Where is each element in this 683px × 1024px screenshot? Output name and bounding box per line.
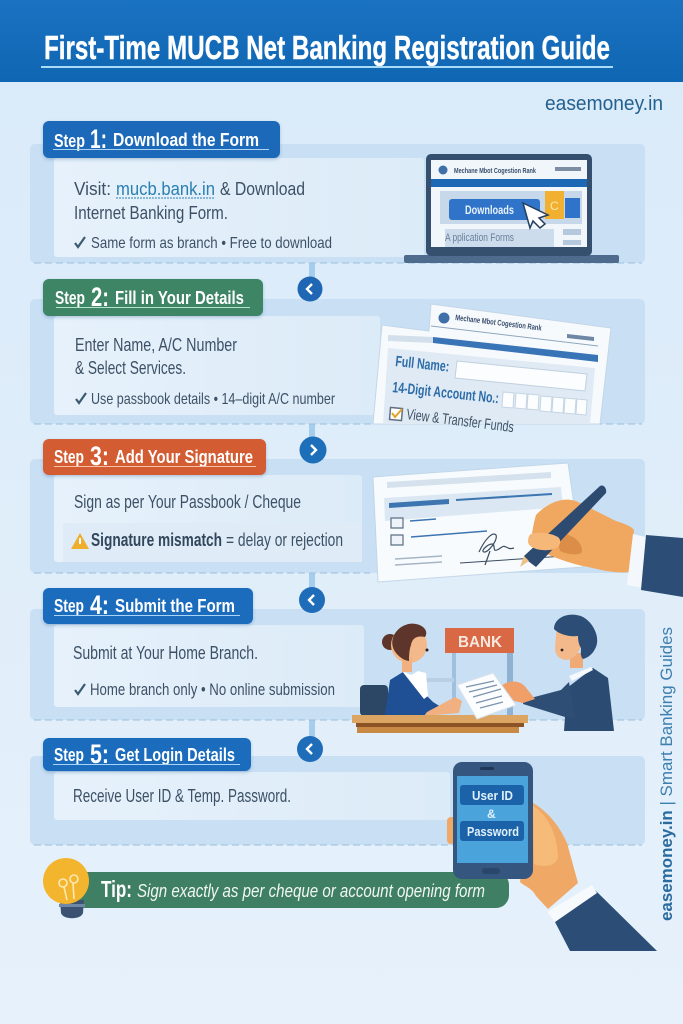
step 4 heading tag: 4: (90, 590, 109, 620)
step 4 heading tag: Step (54, 595, 84, 616)
step 2 heading tag: Step (55, 287, 85, 308)
step 1 heading tag: Step (54, 130, 85, 151)
step 1 text: Visit: (74, 179, 111, 199)
step 2 text: & Select Services. (75, 358, 186, 378)
connector lines between steps (309, 263, 315, 772)
step 5 heading tag: 5: (90, 739, 109, 769)
step 2 heading tag: 2: (91, 282, 109, 312)
brand: easemoney.in: easemoney.in (545, 93, 663, 115)
tip bar: Sign exactly as per cheque or account opening form (137, 881, 485, 901)
man customer (502, 615, 614, 731)
step 1 text: mucb.bank.in (116, 179, 215, 199)
panel: step 5 (30, 738, 645, 845)
step 2 heading tag: Fill in Your Details (115, 287, 244, 308)
step 1 heading tag (43, 121, 280, 158)
step 1 text: & Download (220, 179, 305, 199)
step 5 heading tag: Get Login Details (115, 744, 235, 765)
step 1 heading tag: 1: (90, 124, 107, 154)
step 1 heading tag: Download the Form (113, 129, 259, 150)
illustration: hand holding phone (447, 762, 657, 951)
icon: laptop with downloads page: C (550, 199, 559, 213)
step 1 text: Internet Banking Form. (74, 203, 228, 223)
step 1 text: Same form as branch • Free to download (91, 235, 332, 252)
bank sign (445, 628, 514, 653)
icon: laptop with downloads page: Downloads (465, 203, 514, 217)
step 2 text (75, 335, 336, 408)
phone (453, 762, 533, 879)
panel: step 4 (30, 588, 645, 733)
arrow: step 1 to 2 (298, 276, 322, 302)
vertical brand line: easemoney.in | Smart Banking Guides (657, 627, 676, 921)
bank sign: BANK (458, 634, 502, 651)
panel: step 1 (30, 121, 645, 263)
icon: laptop with downloads page: A pplication Forms (445, 232, 514, 244)
step 2 text: Enter Name, A/C Number (75, 335, 237, 355)
phone: & (487, 807, 496, 821)
illustration: application form: Full Name: (395, 353, 450, 376)
warning line: Signature mismatch (91, 530, 222, 550)
illustration: cheque and signing hand (373, 463, 683, 597)
tip bar (72, 872, 509, 908)
illustration: application form: 14-Digit Account No.: (392, 379, 500, 407)
icon: laptop with downloads page (404, 154, 619, 263)
phone: User ID (472, 788, 513, 803)
step 3 text: Sign as per Your Passbook / Cheque (74, 492, 301, 512)
panel: step 3 (30, 439, 683, 597)
arrow: step 4 to 5 (297, 736, 323, 762)
warning line (71, 530, 343, 550)
step 1 text (74, 179, 332, 252)
step 3 heading tag: Add Your Signature (115, 446, 253, 467)
illustration: bank counter handover (352, 615, 614, 733)
step 5 text: Receive User ID & Temp. Password. (73, 786, 291, 806)
step 2 heading tag (43, 279, 263, 316)
icon: light bulb (43, 858, 89, 918)
step 3 heading tag (43, 439, 266, 475)
step 4 text: Home branch only • No online submission (90, 680, 335, 699)
tip bar: Tip: (101, 876, 132, 902)
panel: step 2 (30, 279, 645, 436)
step 2 text: Use passbook details • 14–digit A/C number (91, 391, 336, 408)
step 4 text: Submit at Your Home Branch. (73, 643, 258, 663)
desk (352, 715, 528, 733)
step 4 heading tag: Submit the Form (115, 595, 235, 616)
arrow: step 2 to 3 (300, 436, 326, 464)
step 5 heading tag: Step (54, 744, 84, 765)
woman banker (382, 624, 462, 716)
illustration: application form: Mechane Mbot Cogestion Rank (455, 313, 543, 333)
illustration: application form (373, 304, 611, 436)
icon: laptop with downloads page: Mechane Mbot Cogestion Rank (454, 166, 537, 175)
header banner (0, 0, 683, 82)
arrow: step 3 to 4 (299, 587, 325, 613)
step 4 text (73, 643, 335, 699)
step 3 heading tag: 3: (90, 441, 109, 471)
warning line: = delay or rejection (226, 530, 343, 550)
step 5 heading tag (43, 738, 251, 771)
step 4 heading tag (43, 588, 253, 624)
phone: Password (467, 824, 519, 839)
document being handed over (457, 673, 516, 719)
step 3 heading tag: Step (54, 446, 84, 467)
illustration: application form: View & Transfer Funds (406, 406, 515, 436)
